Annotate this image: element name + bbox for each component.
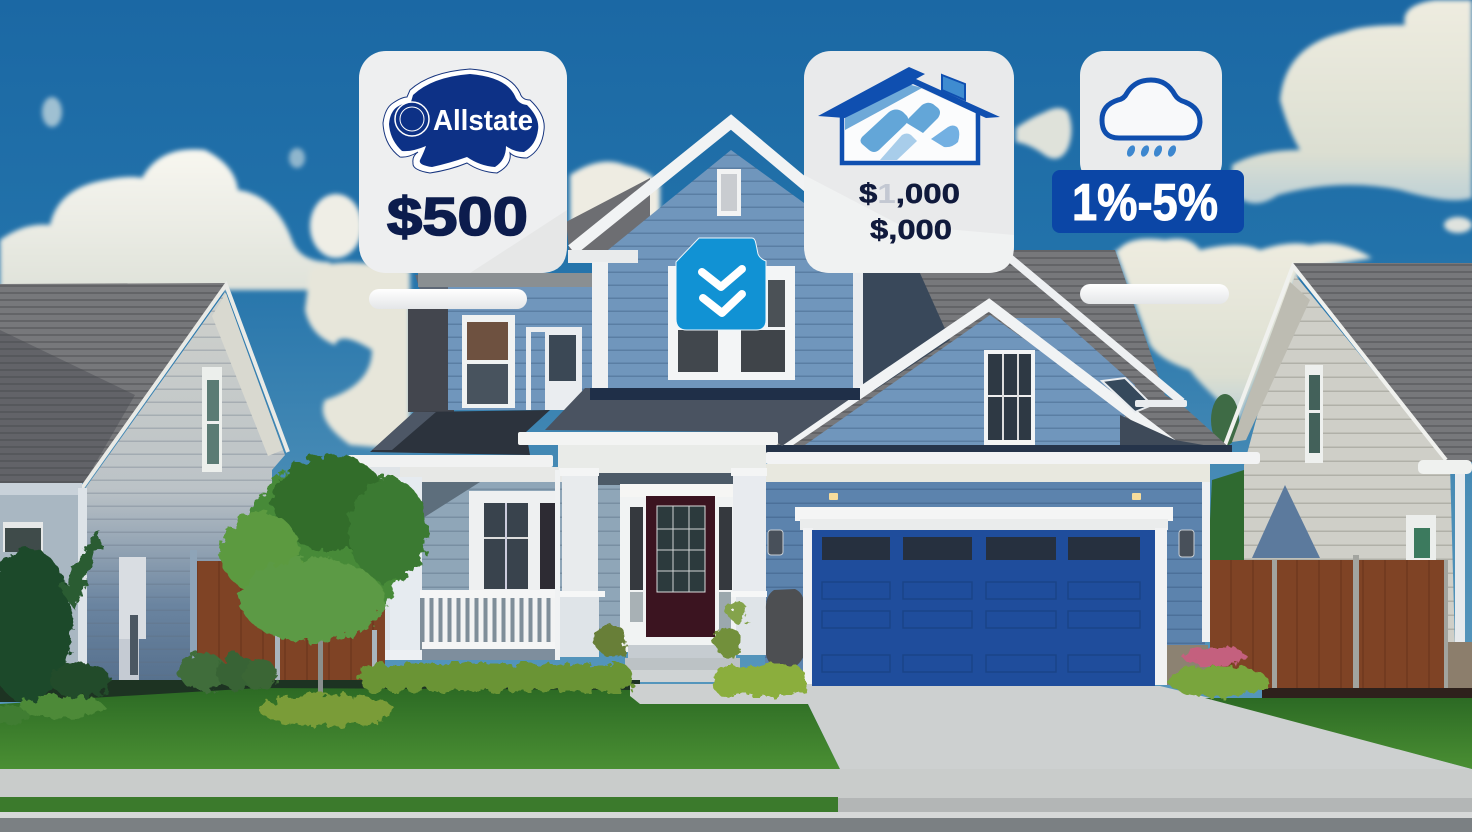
step shrub (713, 665, 805, 696)
dark shrub at left (0, 530, 110, 724)
lower right gable trim (1005, 254, 1182, 402)
percentage banner: 1%-5% (1072, 174, 1218, 232)
porch railing (420, 590, 558, 660)
logo wordmark: Allstate (433, 105, 533, 137)
check badge (676, 238, 766, 330)
porch lights (829, 493, 838, 500)
garage (795, 507, 1173, 686)
upper double window (668, 266, 795, 380)
window (1305, 365, 1323, 463)
flower bush (1168, 647, 1268, 697)
gable vent (717, 169, 741, 216)
dormer vent detail (1102, 378, 1152, 412)
lawn, driveway and pavement (0, 680, 1472, 832)
fences (190, 550, 1448, 688)
eaves (348, 455, 553, 467)
upper left window (462, 315, 515, 408)
window (202, 367, 222, 472)
small window (526, 327, 582, 410)
hedge (360, 664, 632, 691)
far left column (390, 477, 422, 655)
rear roof left of gable (566, 178, 650, 260)
trees behind (1208, 470, 1244, 560)
wall (84, 292, 285, 684)
tree and shrubs (0, 455, 1268, 726)
right dark roof edge (1120, 415, 1232, 452)
amount high: $,000 (870, 214, 952, 245)
trim (1225, 266, 1446, 460)
door surround (620, 484, 737, 652)
deductible card: dwelling (804, 51, 1014, 273)
steps (628, 645, 736, 658)
shadow (1252, 485, 1320, 558)
roof (0, 283, 226, 483)
tree base shrub (259, 694, 395, 726)
shrub trio (179, 653, 277, 691)
label pill left (369, 289, 527, 309)
metal porch roof (545, 388, 860, 446)
porch window (469, 491, 560, 591)
deductible card: Allstate (359, 51, 567, 273)
porch beam (518, 432, 778, 445)
main upper wall (608, 150, 862, 395)
label pill right (1080, 284, 1229, 304)
porch columns (562, 473, 598, 591)
roof (1293, 263, 1472, 462)
amount: $500 (387, 187, 528, 247)
right neighbouring house (1208, 263, 1472, 688)
left dark roof (370, 410, 550, 455)
deductible card: wind and hail (1052, 51, 1244, 233)
front door (646, 496, 715, 637)
cloud icon (1102, 80, 1200, 158)
lanterns (768, 530, 783, 555)
trim (82, 285, 288, 488)
porch shrubs (595, 602, 748, 657)
tree (220, 455, 428, 696)
house icon (818, 67, 1000, 164)
main house (345, 122, 1260, 686)
wall (1244, 275, 1456, 684)
left neighbouring house (0, 283, 288, 685)
big side roof (770, 250, 1232, 450)
lower walls (345, 467, 425, 562)
upper gable trim (572, 122, 812, 250)
eave and column (1418, 460, 1472, 474)
lower right gable wall (805, 315, 1125, 445)
gable window (984, 350, 1035, 446)
clouds (0, 0, 1472, 450)
upper left wall (408, 290, 454, 412)
amount low: $1,000 (859, 178, 960, 209)
utility box (119, 557, 146, 639)
logo (383, 69, 544, 173)
